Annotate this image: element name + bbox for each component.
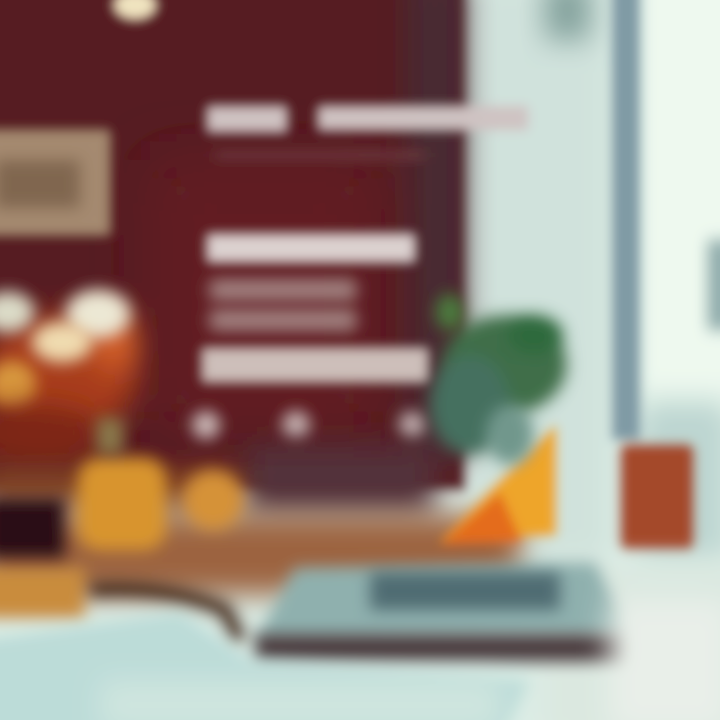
pumpkins xyxy=(78,418,243,550)
desk surface right xyxy=(540,565,720,720)
red cup xyxy=(620,240,720,550)
ceiling light xyxy=(113,0,157,20)
text block xyxy=(202,234,428,382)
table xyxy=(0,470,520,618)
shelf shadow xyxy=(245,445,435,515)
glasses on table xyxy=(90,589,240,640)
laptop xyxy=(255,562,630,662)
dark object xyxy=(0,498,65,558)
picture frame xyxy=(0,130,110,235)
orange triangle pot xyxy=(440,425,556,544)
window post xyxy=(612,0,640,440)
bullet dots xyxy=(193,412,424,438)
glowing bow xyxy=(0,290,138,465)
papers xyxy=(0,612,530,720)
white cup xyxy=(610,600,720,720)
sub-heading trace xyxy=(215,150,425,160)
heading bar xyxy=(207,106,528,132)
maroon wall xyxy=(0,0,465,490)
plant xyxy=(430,294,567,465)
